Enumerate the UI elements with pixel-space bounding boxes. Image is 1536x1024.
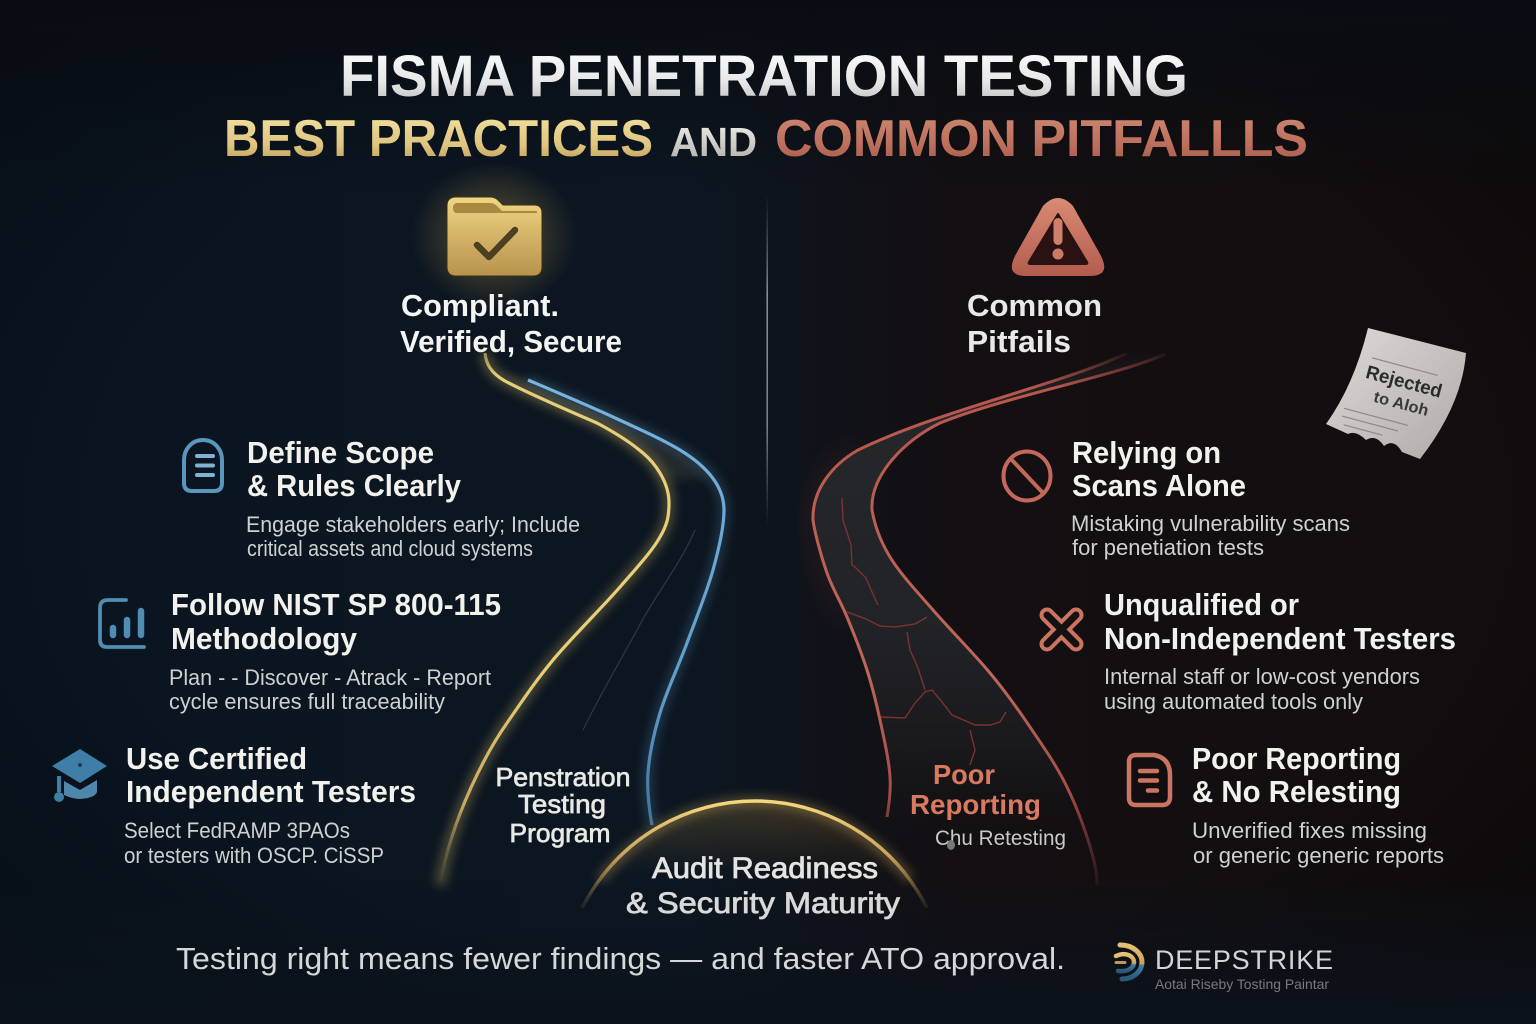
logo: deepstrike: Aotai Riseby Tosting Paintar bbox=[1155, 976, 1329, 992]
item: relying on scans bbox=[1004, 435, 1350, 560]
label: penetration testing program: Testing bbox=[518, 789, 606, 819]
dome: audit readiness: & Security Maturity bbox=[626, 887, 900, 920]
title: COMMON PITFALLLS bbox=[775, 110, 1308, 168]
item: poor reporting: or generic generic reports bbox=[1193, 843, 1444, 868]
item: follow NIST: Methodology bbox=[171, 621, 358, 656]
icon: rejected paper: to Aloh bbox=[1372, 389, 1430, 420]
item: relying on scans: Relying on bbox=[1072, 435, 1221, 470]
heading: common pitfalls bbox=[967, 288, 1102, 359]
label: penetration testing program: Penstration bbox=[496, 762, 630, 792]
label: poor reporting: Chu Retesting bbox=[935, 827, 1066, 850]
faint centre line bbox=[583, 530, 695, 730]
dome: audit readiness: Audit Readiness bbox=[652, 852, 878, 885]
item: define scope bbox=[184, 435, 580, 561]
label: poor reporting: Reporting bbox=[910, 789, 1041, 820]
icon: logo mark bbox=[1116, 945, 1142, 979]
road haze bbox=[490, 370, 713, 480]
icon: rejected paper bbox=[1326, 328, 1466, 459]
right road: cracked red road bbox=[813, 353, 1165, 885]
icon: rejected paper: Rejected bbox=[1363, 362, 1444, 403]
blue line bbox=[528, 380, 724, 825]
heading: common pitfalls: Pitfails bbox=[967, 324, 1071, 359]
label: penetration testing program: Program bbox=[510, 818, 610, 848]
road cracks bbox=[842, 498, 1006, 765]
label: poor reporting bbox=[910, 759, 1066, 850]
item: define scope: critical assets and cloud systems bbox=[247, 536, 533, 561]
logo: deepstrike: DEEPSTRIKE bbox=[1155, 945, 1333, 975]
icon: prohibition sign bbox=[1004, 452, 1050, 500]
label: poor reporting: Poor bbox=[933, 759, 995, 790]
item: poor reporting: Unverified fixes missing bbox=[1192, 818, 1427, 843]
gold line bbox=[440, 353, 669, 885]
title bbox=[224, 44, 1308, 168]
item: follow NIST: Plan - - Discover - Atrack - Report bbox=[169, 665, 491, 690]
item: unqualified testers: Unqualified or bbox=[1104, 587, 1299, 622]
item: certified testers bbox=[52, 741, 416, 868]
road glow bbox=[813, 450, 858, 617]
item: certified testers: or testers with OSCP. CiSSP bbox=[124, 843, 384, 868]
item: define scope: & Rules Clearly bbox=[247, 468, 462, 503]
road surface bbox=[813, 353, 1165, 840]
item: unqualified testers: Non-Independent Testers bbox=[1104, 621, 1456, 656]
left road: gold and blue lines bbox=[440, 353, 724, 885]
heading: compliant bbox=[400, 288, 622, 359]
item: certified testers: Independent Testers bbox=[126, 774, 416, 809]
icon: gold folder with check bbox=[410, 162, 578, 310]
icon: document bbox=[184, 440, 222, 491]
icon: warning triangle bbox=[1012, 198, 1104, 276]
item: relying on scans: Mistaking vulnerability scans bbox=[1071, 511, 1350, 536]
logo: deepstrike bbox=[1116, 945, 1333, 992]
icon: graduation cap bbox=[52, 749, 107, 802]
heading: compliant: Compliant. bbox=[401, 288, 559, 323]
item: poor reporting bbox=[1129, 741, 1444, 868]
item: unqualified testers bbox=[1047, 587, 1456, 714]
item: define scope: Define Scope bbox=[247, 435, 434, 470]
title: BEST PRACTICES bbox=[224, 110, 653, 168]
item: certified testers: Select FedRAMP 3PAOs bbox=[124, 818, 350, 843]
icon: bar chart bbox=[100, 600, 144, 647]
item: follow NIST: cycle ensures full traceability bbox=[169, 689, 445, 714]
heading: common pitfalls: Common bbox=[967, 288, 1102, 323]
item: certified testers: Use Certified bbox=[126, 741, 307, 776]
item: unqualified testers: Internal staff or low-cost yendors bbox=[1104, 664, 1420, 689]
dome: audit readiness bbox=[582, 801, 927, 920]
title: AND bbox=[670, 119, 757, 165]
heading: compliant: Verified, Secure bbox=[400, 324, 622, 359]
item: define scope: Engage stakeholders early; Include bbox=[246, 512, 580, 537]
icon: x mark bbox=[1047, 615, 1076, 644]
item: relying on scans: for penetiation tests bbox=[1072, 535, 1264, 560]
icon: report document bbox=[1129, 755, 1170, 805]
item: unqualified testers: using automated tools only bbox=[1104, 689, 1363, 714]
title: FISMA PENETRATION TESTING bbox=[340, 44, 1188, 109]
center divider line bbox=[766, 195, 768, 525]
item: poor reporting: & No Relesting bbox=[1192, 774, 1401, 809]
label: penetration testing program bbox=[496, 762, 630, 848]
item: follow NIST bbox=[100, 587, 501, 714]
right edge line bbox=[872, 354, 1165, 885]
item: follow NIST: Follow NIST SP 800-115 bbox=[171, 587, 501, 622]
left edge line bbox=[813, 353, 1127, 817]
item: poor reporting: Poor Reporting bbox=[1192, 741, 1401, 776]
tagline: Testing right means fewer findings — and faster ATO approval. bbox=[176, 941, 1065, 976]
item: relying on scans: Scans Alone bbox=[1072, 468, 1246, 503]
